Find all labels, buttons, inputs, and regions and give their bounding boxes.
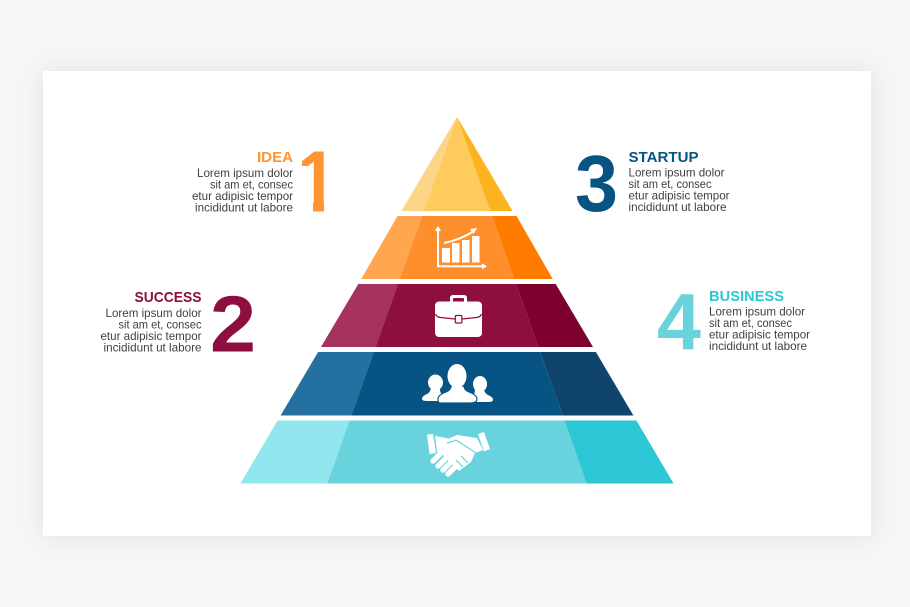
icon: three people <box>422 364 493 403</box>
number 4: 4 <box>657 277 701 366</box>
tier 3: crimson <box>321 284 593 347</box>
body text: Lorem ipsum dolor <box>628 166 725 180</box>
heading: BUSINESS <box>709 288 784 305</box>
body text: sit am et, consec <box>628 177 712 191</box>
tier 4: blue <box>281 352 633 416</box>
body text: Lorem ipsum dolor <box>106 306 202 320</box>
body text <box>100 306 202 354</box>
body text: Lorem ipsum dolor <box>709 304 805 318</box>
block 4: business <box>657 277 810 366</box>
body text: etur adipisic tempor <box>628 188 730 202</box>
block 2: success <box>100 280 256 368</box>
block 3: startup <box>575 139 730 228</box>
body text: incididunt ut labore <box>628 200 727 214</box>
block 1: idea <box>192 152 324 212</box>
icon: briefcase <box>435 295 482 337</box>
body text <box>628 166 730 214</box>
body text: incididunt ut labore <box>709 339 807 353</box>
number 1: 1 <box>297 134 337 230</box>
body text <box>709 304 810 353</box>
tier 5: teal <box>240 420 674 484</box>
icon: handshake <box>427 432 490 474</box>
body text: incididunt ut labore <box>195 200 293 214</box>
pyramid <box>240 117 674 484</box>
icon: growth chart <box>435 226 487 269</box>
body text: etur adipisic tempor <box>192 189 293 203</box>
body text: etur adipisic tempor <box>100 329 202 343</box>
heading: SUCCESS <box>134 289 202 306</box>
number 3: 3 <box>575 139 618 228</box>
tier 1: yellow apex <box>401 117 513 211</box>
number 2: 2 <box>210 280 256 368</box>
tier 2: orange <box>361 216 553 279</box>
card background <box>43 71 871 536</box>
body text: incididunt ut labore <box>104 340 202 354</box>
body text: sit am et, consec <box>118 318 202 332</box>
heading: STARTUP <box>628 149 698 166</box>
body text <box>192 166 293 214</box>
body text: Lorem ipsum dolor <box>197 166 293 180</box>
body text: etur adipisic tempor <box>709 328 810 342</box>
body text: sit am et, consec <box>709 316 792 330</box>
body text: sit am et, consec <box>210 178 293 192</box>
heading: IDEA <box>257 149 293 166</box>
